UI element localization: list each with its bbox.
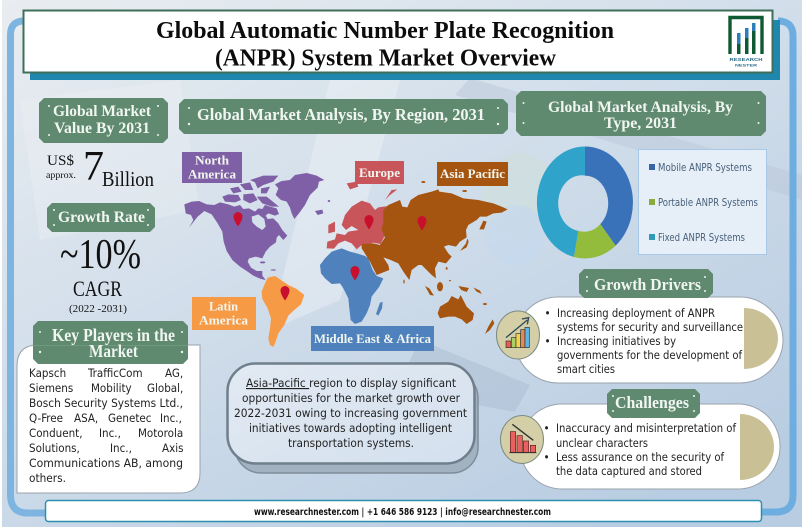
growth drivers text: systems for security and surveillance	[557, 320, 743, 334]
title text: (ANPR) System Market Overview	[215, 46, 557, 72]
legend: Mobile: Mobile ANPR Systems	[658, 162, 752, 174]
title text	[156, 18, 614, 72]
key players list: Communications AB, among	[29, 456, 183, 470]
growth drivers text: •	[544, 334, 551, 348]
callout: Asia-Pacific	[228, 364, 478, 473]
market value figure: approx.	[46, 171, 76, 181]
label: Asia Pacific	[437, 162, 508, 186]
logo: Research Nester	[730, 18, 763, 68]
heading: Global Market Value By 2031: Global Market	[53, 103, 152, 120]
map region: North America	[184, 173, 330, 280]
panel: key players	[17, 321, 200, 493]
market value figure: Billion	[102, 167, 154, 191]
callout: Asia-Pacific: 2022-2031 owing to increasing government	[234, 406, 467, 420]
footer contact bar	[46, 500, 762, 522]
heading: Growth Drivers: Growth Drivers	[594, 275, 701, 294]
key players list: Kapsch	[29, 366, 66, 380]
key players list: Inc.,	[110, 441, 132, 455]
challenges text	[544, 421, 736, 478]
growth drivers text: Increasing deployment of ANPR	[557, 306, 715, 320]
heading: Challenges	[607, 389, 700, 418]
donut chart	[537, 146, 633, 259]
map region: Latin America	[262, 276, 304, 347]
label: Latin America: America	[199, 312, 249, 328]
heading: Global Market Value By 2031: Value By 2031	[54, 120, 150, 137]
key players list: Q-Free	[29, 411, 63, 425]
map region: Europe	[327, 182, 397, 249]
growth rate figure: CAGR	[73, 276, 122, 301]
callout: Asia-Pacific: opportunities for the market growth over	[242, 391, 461, 405]
key players list: ASA,	[74, 411, 98, 425]
heading: Key Players in the Market: Market	[89, 341, 138, 361]
key players list: others.	[29, 471, 66, 485]
growth rate figure: (2022 -2031)	[69, 303, 127, 315]
key players list: TrafficCom	[87, 366, 143, 380]
footer contact bar: www.researchnester.com | +1 646 586 9123 | info@researchnester.com	[254, 507, 551, 518]
label: Latin America: Latin	[209, 298, 239, 314]
title text: Global Automatic Number Plate Recognition	[156, 18, 614, 44]
key players list: Bosch Security Systems Ltd.,	[29, 396, 183, 410]
heading: Growth Rate: Growth Rate	[58, 209, 145, 226]
market value figure: US$	[47, 153, 74, 169]
icon: falling bar chart	[500, 416, 544, 464]
growth drivers text: •	[544, 306, 551, 320]
label: North America: America	[188, 166, 237, 182]
title panel	[24, 10, 780, 80]
key players list: Mobility	[91, 381, 132, 395]
growth drivers text	[544, 306, 743, 376]
heading: Challenges: Challenges	[615, 393, 689, 412]
heading: Global Market Value By 2031	[39, 98, 168, 143]
panel: challenges	[500, 389, 780, 489]
map region: Middle East and Africa	[320, 248, 383, 324]
growth rate figure: ~10%	[60, 232, 141, 278]
legend: Portable: Portable ANPR Systems	[658, 197, 758, 209]
heading: Global Market Analysis, By Type: Type, 2031	[604, 115, 677, 132]
label: North America: North	[195, 152, 230, 168]
key players list: Inc.,	[160, 411, 182, 425]
label: Asia Pacific: Asia Pacific	[440, 166, 505, 181]
challenges text: •	[544, 421, 550, 435]
map region: Asia Pacific	[362, 181, 508, 334]
heading: Global Market Analysis, By Region	[179, 99, 508, 134]
challenges text: Inaccuracy and misinterpretation of	[556, 421, 736, 435]
heading: Global Market Analysis, By Type: Global Market Analysis, By	[548, 99, 733, 116]
panel: growth rate	[47, 203, 155, 315]
label: Europe	[355, 161, 404, 184]
key players list: Genetec	[108, 411, 152, 425]
key players list: Conduent,	[29, 426, 83, 440]
key players list: Motorola	[138, 426, 183, 440]
callout: Asia-Pacific: Asia-Pacific region to display significant	[246, 376, 456, 390]
legend	[638, 150, 766, 254]
logo: Research Nester: RESEARCH	[730, 57, 763, 62]
market value figure	[46, 144, 154, 191]
growth drivers text: smart cities	[557, 362, 615, 376]
challenges text: •	[544, 450, 550, 464]
label: North America	[182, 152, 242, 183]
heading: Global Market Analysis, By Type	[516, 91, 766, 136]
key players list	[29, 366, 183, 485]
label: Middle East and Africa: Middle East & Africa	[314, 331, 431, 346]
heading: Key Players in the Market	[33, 321, 188, 364]
growth drivers text: Increasing initiatives by	[557, 334, 676, 348]
callout: Asia-Pacific: transportation systems.	[288, 436, 414, 450]
key players list: Siemens	[29, 381, 73, 395]
heading: Key Players in the Market: Key Players in the	[52, 325, 175, 345]
logo: Research Nester: NESTER	[735, 62, 757, 68]
key players list: Axis	[162, 441, 183, 455]
label: Europe: Europe	[359, 165, 400, 180]
challenges text: unclear characters	[556, 436, 648, 450]
key players list: AG,	[165, 366, 183, 380]
world map	[182, 152, 508, 351]
growth drivers text: governments for the development of	[557, 348, 742, 362]
label: Latin America	[192, 297, 256, 330]
key players list: Solutions,	[29, 441, 80, 455]
key players list: Inc.,	[99, 426, 121, 440]
map pins	[234, 212, 426, 300]
legend: Fixed: Fixed ANPR Systems	[658, 232, 745, 244]
heading: Growth Drivers	[579, 269, 713, 298]
challenges text: Less assurance on the security of	[556, 450, 724, 464]
panel: growth drivers	[496, 269, 783, 383]
market value figure: 7	[83, 144, 104, 190]
label: Middle East and Africa	[311, 326, 434, 351]
heading: Global Market Analysis, By Region: Global Market Analysis, By Region, 2031	[197, 105, 485, 124]
panel: market value	[39, 98, 168, 191]
key players list: Global,	[147, 381, 183, 395]
challenges text: the data captured and stored	[556, 464, 702, 478]
icon: rising bar chart	[496, 311, 540, 359]
callout: Asia-Pacific: initiatives towards adopting intelligent	[249, 421, 452, 435]
growth rate figure	[60, 232, 141, 315]
